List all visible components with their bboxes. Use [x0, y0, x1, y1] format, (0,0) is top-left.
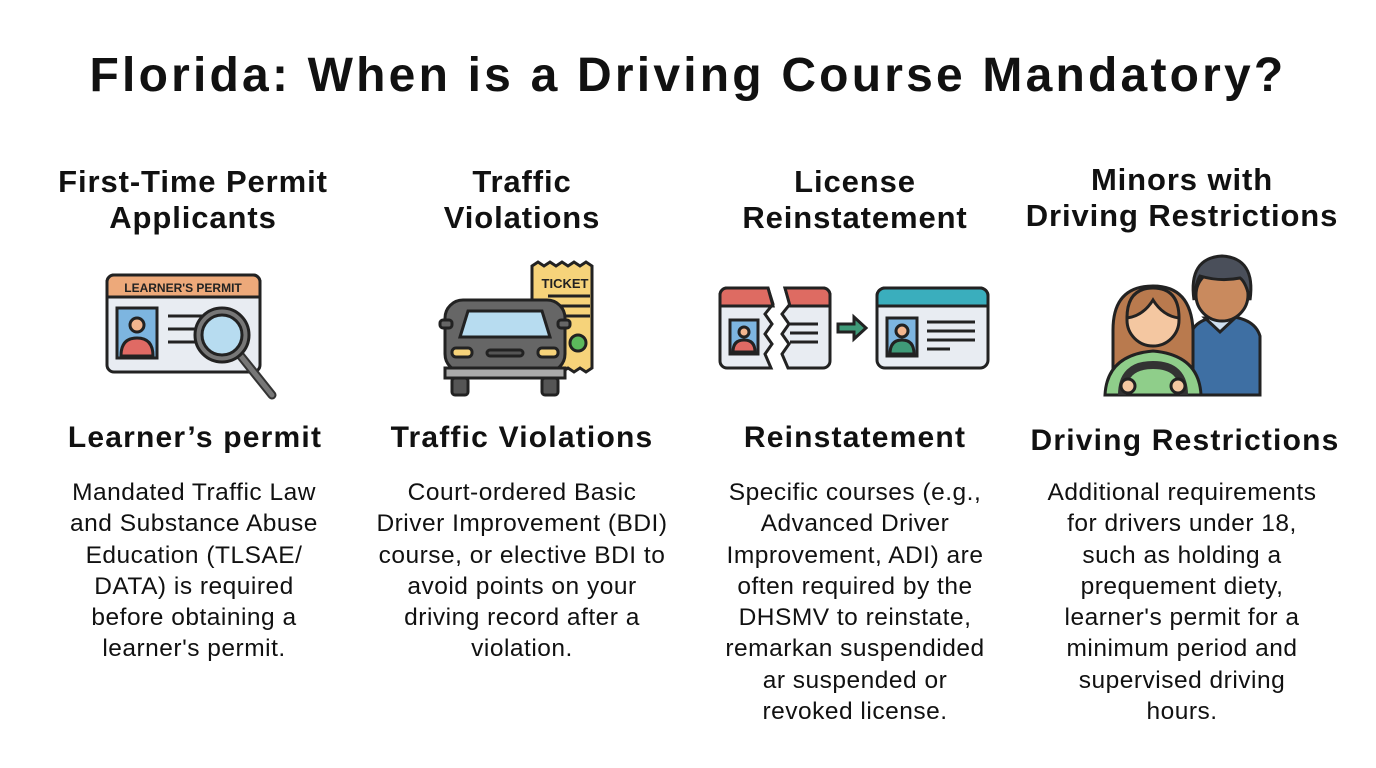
body: driving restrictions: prequement diety, — [1081, 573, 1283, 600]
title: Florida: When is a Driving Course Mandatory? — [90, 49, 1286, 102]
body: learner's permit: learner's permit. — [102, 635, 286, 662]
body: traffic violations: avoid points on your — [407, 573, 637, 600]
body: traffic violations: Court-ordered Basic — [408, 479, 636, 506]
heading: traffic violations: Violations — [444, 200, 600, 235]
heading: traffic violations: Traffic — [472, 164, 572, 199]
heading: minors — [1026, 162, 1338, 233]
body: reinstatement: often required by the — [737, 573, 973, 600]
heading: license reinstatement — [742, 164, 968, 235]
heading: first-time permit applicants: Applicants — [109, 200, 277, 235]
body: learner's permit: before obtaining a — [91, 604, 297, 631]
subheading: reinstatement: Reinstatement — [744, 421, 966, 454]
icon: broken license to new license — [720, 288, 988, 368]
body: driving restrictions: Additional requirements — [1048, 479, 1316, 506]
body: reinstatement: Specific courses (e.g., — [729, 479, 981, 506]
body: learner's permit — [70, 479, 318, 662]
body: reinstatement: remarkan suspendided — [725, 635, 985, 662]
body: traffic violations: course, or elective BDI to — [379, 542, 665, 569]
body: reinstatement: DHSMV to reinstate, — [739, 604, 971, 631]
body: traffic violations: violation. — [471, 635, 573, 662]
body: driving restrictions: hours. — [1146, 698, 1218, 725]
subheading: driving restrictions: Driving Restrictions — [1030, 424, 1340, 457]
body: driving restrictions: supervised driving — [1079, 667, 1285, 694]
body: learner's permit: Education (TLSAE/ — [86, 542, 302, 569]
body: learner's permit: and Substance Abuse — [70, 510, 318, 537]
heading: minors: Minors with — [1091, 162, 1273, 197]
body: learner's permit: Mandated Traffic Law — [72, 479, 316, 506]
subheading: learner's permit: Learner’s permit — [68, 421, 322, 454]
heading: traffic violations — [444, 164, 600, 235]
body: traffic violations: driving record after a — [404, 604, 640, 631]
body: driving restrictions: learner's permit for a — [1065, 604, 1299, 631]
body: reinstatement: ar suspended or — [763, 667, 947, 694]
icon: car with ticket: TICKET — [542, 276, 589, 291]
body: driving restrictions — [1048, 479, 1316, 725]
body: driving restrictions: for drivers under 18, — [1067, 510, 1297, 537]
subheading: traffic violations: Traffic Violations — [391, 421, 653, 454]
heading: minors: Driving Restrictions — [1026, 198, 1338, 233]
body: reinstatement: Advanced Driver — [761, 510, 949, 537]
icon: learner's permit card — [107, 275, 272, 395]
body: traffic violations: Driver Improvement (BDI) — [376, 510, 668, 537]
body: driving restrictions: such as holding a — [1082, 542, 1282, 569]
icon: car with ticket — [440, 262, 592, 395]
icon: learner's permit card: LEARNER'S PERMIT — [124, 281, 242, 295]
heading: license reinstatement: Reinstatement — [742, 200, 968, 235]
heading: first-time permit applicants: First-Time Permit — [58, 164, 328, 199]
heading: license reinstatement: License — [794, 164, 916, 199]
body: reinstatement: Improvement, ADI) are — [727, 542, 983, 569]
body: reinstatement — [725, 479, 985, 725]
heading: first-time permit applicants — [58, 164, 328, 235]
body: driving restrictions: minimum period and — [1067, 635, 1297, 662]
body: reinstatement: revoked license. — [762, 698, 948, 725]
body: traffic violations — [376, 479, 668, 662]
icon: minor and supervising adult — [1105, 256, 1260, 395]
body: learner's permit: DATA) is required — [94, 573, 294, 600]
